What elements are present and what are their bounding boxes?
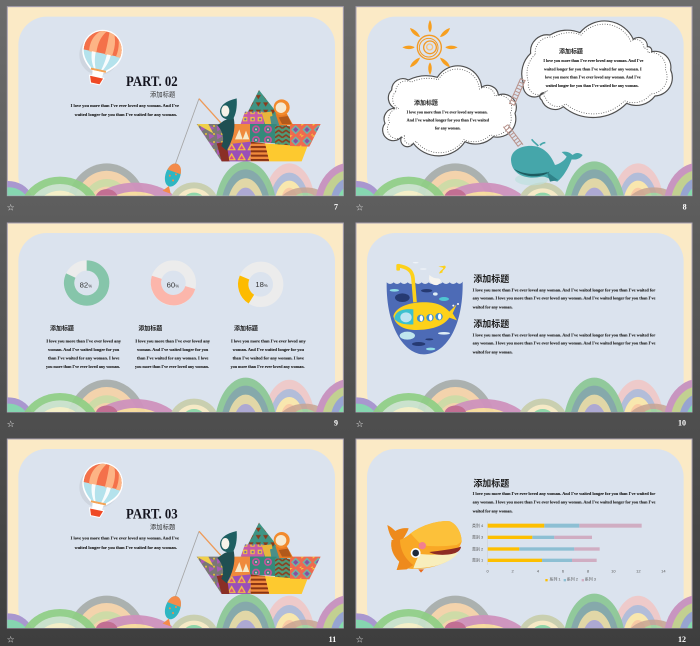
slide 10: submarine and two text blocks (356, 223, 692, 430)
stacked horizontal bar chart: 系列 2 (567, 576, 579, 582)
body text (71, 536, 179, 550)
slide 11 rainbow hills (7, 594, 343, 628)
text block 2: I love you more than I've ever loved any woman. And I've waited longer for you than I've waited for (473, 332, 655, 337)
text block 1: 添加标题 (473, 273, 509, 284)
stacked horizontal bar chart: 类别 3 (472, 534, 484, 540)
text column 3: than I've waited for any woman. I love (233, 356, 304, 361)
stacked horizontal bar chart: 4 (537, 569, 540, 574)
cloud callout: right: I love you more than I've ever loved any woman. And I've (543, 58, 643, 63)
donut chart 60% (156, 265, 191, 300)
subtitle: 添加标题 (150, 89, 176, 98)
text column 3: I love you more than I've ever loved any (231, 339, 306, 344)
footer star: ☆ (7, 636, 15, 646)
slide 10 background panel (356, 223, 692, 412)
slide 7: section divider PART. 02 (7, 7, 343, 214)
cloud callout: left: And I've waited longer for you than I've waited (407, 118, 490, 123)
heading and body text (473, 477, 655, 513)
illustration: yellow submarine in water bowl (387, 262, 463, 354)
page number 7: 7 (334, 202, 338, 211)
icon: orange whale (387, 521, 462, 573)
body text (71, 103, 179, 117)
text column 3 (231, 324, 306, 369)
donut chart 82%: 82% (80, 281, 92, 290)
cloud callout: right: love you more than I've ever loved any woman. And I've (545, 75, 641, 80)
text column 1: 添加标题 (50, 324, 74, 332)
text column 1: than I've waited for any woman. I love (48, 356, 119, 361)
icon: hot air balloon (74, 26, 127, 88)
text block 2: 添加标题 (473, 318, 509, 329)
donut chart 18%: 18% (255, 280, 268, 289)
footer star: ☆ (7, 204, 15, 214)
text column 1: I love you more than I've ever loved any (46, 339, 122, 344)
page number 12: 12 (678, 635, 686, 644)
cloud callout: left: 添加标题 (414, 99, 438, 107)
text block 1: I love you more than I've ever loved any woman. And I've waited longer for you than I've waited for (473, 287, 655, 292)
ladder between clouds (503, 78, 525, 147)
icon: sun (402, 20, 458, 75)
subtitle: 添加标题 (150, 522, 176, 531)
stacked horizontal bar chart (472, 522, 666, 582)
text column 1: woman. And I've waited longer for you (48, 347, 120, 352)
text block 2: waited for any woman. (473, 349, 513, 354)
text column 2: you more than I've ever loved any woman. (135, 364, 209, 369)
text column 2: I love you more than I've ever loved any (135, 339, 211, 344)
slide 10 rainbow hills (356, 378, 692, 412)
heading and body text: waited for any woman. (473, 508, 513, 513)
body text: waited longer for you than I've waited for any woman. (75, 112, 177, 117)
slide 8 background panel (356, 7, 692, 196)
footer star: ☆ (7, 420, 15, 430)
donut chart 18% (243, 267, 278, 302)
cloud callout: right (522, 21, 672, 117)
slide 9 background panel (7, 223, 343, 412)
heading and body text: 添加标题 (473, 477, 509, 488)
slide 7 background panel (7, 7, 343, 196)
donut chart 82% (69, 265, 104, 300)
icon: hot air balloon (74, 458, 127, 521)
slide 7 rainbow hills (7, 161, 343, 196)
footer star: ☆ (356, 636, 364, 646)
cloud callout: right: waited longer for you than I've waited for any woman. (546, 83, 639, 88)
stacked horizontal bar chart: 12 (636, 569, 641, 574)
stacked horizontal bar chart: 8 (587, 569, 590, 574)
slide 8 rainbow hills (356, 161, 692, 196)
stacked horizontal bar chart: 14 (661, 569, 666, 574)
cloud callout: right: 添加标题 (559, 48, 583, 56)
slide 12 rainbow hills (356, 594, 692, 628)
page number 10: 10 (678, 419, 686, 428)
page number 11: 11 (329, 635, 336, 644)
title: PART. 03: PART. 03 (126, 507, 178, 523)
stacked horizontal bar chart: 10 (611, 569, 616, 574)
stacked horizontal bar chart: 类别 4 (472, 522, 484, 528)
text column 1 (46, 324, 122, 369)
text column 2: 添加标题 (138, 324, 162, 332)
icon: teal whale (511, 139, 583, 185)
text column 3: 添加标题 (234, 324, 258, 332)
slide 12 background panel (356, 439, 692, 628)
text block 1 (473, 273, 655, 309)
page number 8: 8 (683, 202, 687, 211)
slide 12: whale and stacked bar chart (356, 439, 692, 646)
title: PART. 02: PART. 02 (126, 74, 178, 90)
footer star: ☆ (356, 420, 364, 430)
slide 9 rainbow hills (7, 378, 343, 412)
stacked horizontal bar chart: 系列 1 (549, 576, 561, 582)
stacked horizontal bar chart: 6 (562, 569, 565, 574)
page number 9: 9 (334, 418, 338, 427)
text column 2: woman. And I've waited longer for you (137, 347, 209, 352)
stacked horizontal bar chart: 类别 2 (472, 545, 484, 551)
heading and body text: I love you more than I've ever loved any woman. And I've waited longer for you than I've waited for (473, 491, 655, 496)
text block 2 (473, 318, 655, 354)
stacked horizontal bar chart: 类别 1 (472, 557, 484, 563)
slide 11 background panel (7, 439, 343, 628)
text column 1: you more than I've ever loved any woman. (46, 364, 120, 369)
heading and body text: any woman. I love you more than I've ever loved any woman. And I've waited longer for you than I've (473, 500, 655, 505)
stacked horizontal bar chart: 系列 3 (585, 576, 597, 582)
text block 1: any woman. I love you more than I've ever loved any woman. And I've waited longer for you than I've (473, 296, 655, 301)
body text: I love you more than I've ever loved any woman. And I've (71, 536, 179, 541)
cloud callout: left (383, 66, 516, 156)
slide 11: section divider PART. 03 (7, 439, 343, 646)
footer star: ☆ (356, 204, 364, 214)
slide 8: clouds and whale (356, 7, 692, 214)
cloud callout: left: for any woman. (435, 126, 461, 131)
cloud callout: right: waited longer for you than I've waited for any woman. I (544, 66, 642, 71)
body text: I love you more than I've ever loved any woman. And I've (71, 103, 179, 108)
illustration: fisher in patchwork paper boat (160, 90, 321, 195)
text block 1: waited for any woman. (473, 304, 513, 309)
donut chart 60%: 60% (167, 281, 179, 290)
illustration: fisher in patchwork paper boat (160, 523, 321, 627)
body text: waited longer for you than I've waited for any woman. (75, 545, 177, 550)
cloud callout: left: I love you more than I've ever loved any woman. (407, 109, 488, 114)
text column 2: than I've waited for any woman. I love (137, 356, 208, 361)
text column 3: woman. And I've waited longer for you (233, 347, 305, 352)
stacked horizontal bar chart: 2 (512, 569, 515, 574)
slide 9: three donut charts (7, 223, 343, 430)
text column 2 (135, 324, 211, 369)
text column 3: you more than I've ever loved any woman. (231, 364, 305, 369)
stacked horizontal bar chart: 0 (487, 569, 490, 574)
text block 2: any woman. I love you more than I've ever loved any woman. And I've waited longer for you than I've (473, 341, 655, 346)
